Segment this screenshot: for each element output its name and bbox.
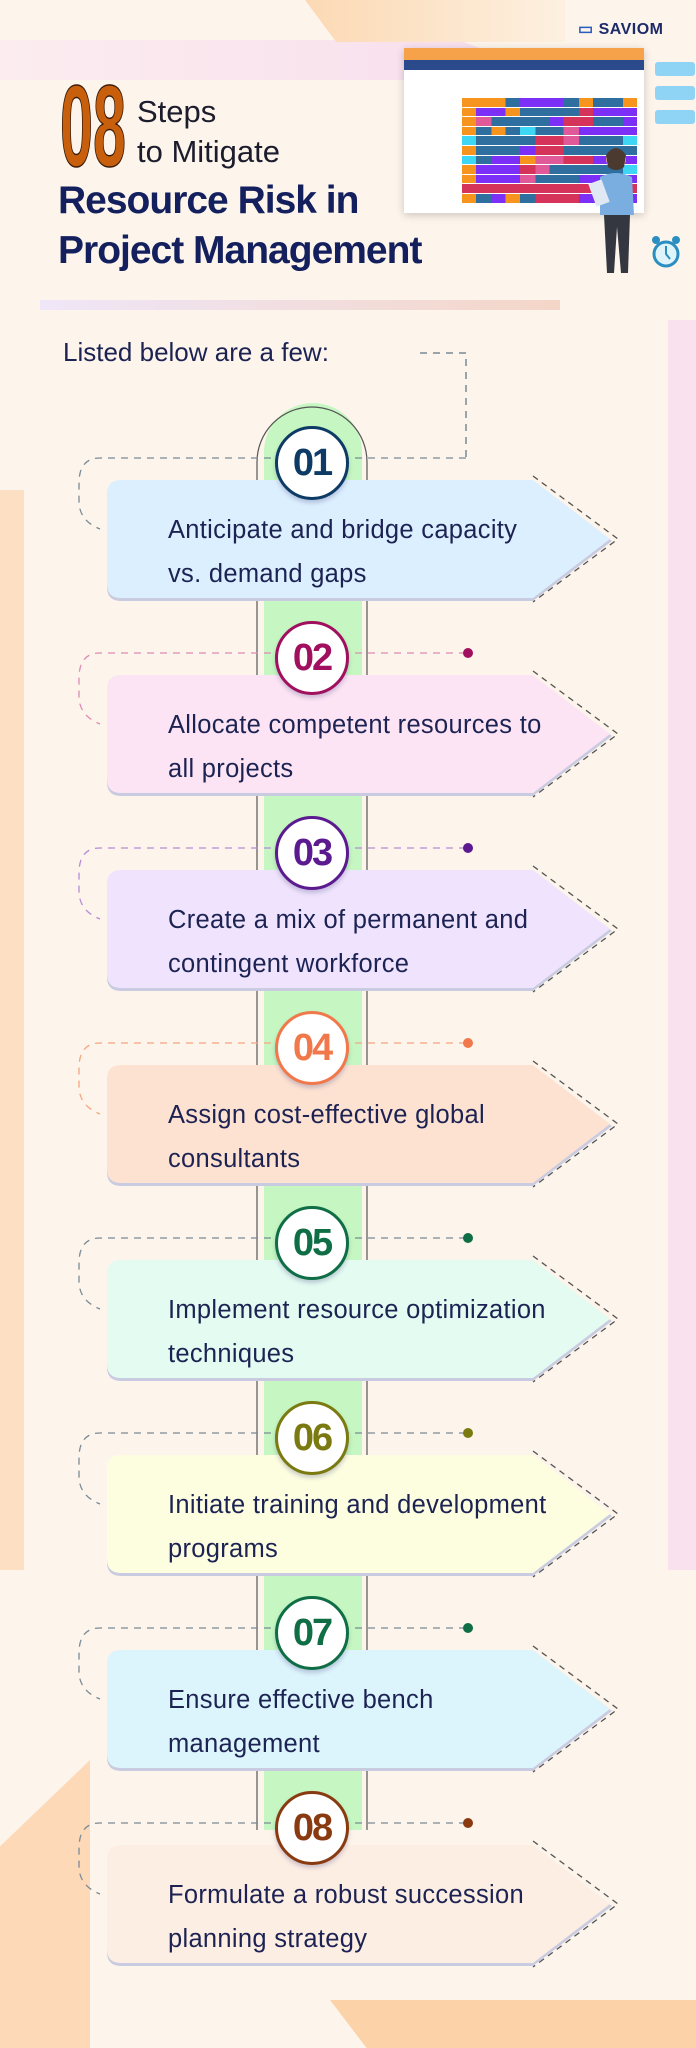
number 05: 05 <box>293 1222 331 1264</box>
number 06 <box>275 1401 349 1475</box>
step 5: Implement resource optimization <box>168 1296 546 1324</box>
step 1: vs. demand gaps <box>168 560 367 588</box>
illustration: man with clipboard <box>588 148 634 273</box>
step 8: planning strategy <box>168 1925 367 1953</box>
title: Steps <box>137 94 216 129</box>
number 04 <box>275 1011 349 1085</box>
number 03: 03 <box>293 832 331 874</box>
intro text: Listed below are a few: <box>63 337 329 367</box>
number 04: 04 <box>293 1027 331 1069</box>
step 3 <box>78 816 618 992</box>
number 08: 08 <box>293 1807 331 1849</box>
title: Resource Risk in <box>58 179 358 222</box>
icon: chat bubbles <box>655 62 695 124</box>
title: to Mitigate <box>137 134 280 169</box>
step 1: Anticipate and bridge capacity <box>168 516 517 544</box>
step 2 <box>78 621 618 798</box>
step 8: Formulate a robust succession <box>168 1881 524 1909</box>
number 06: 06 <box>293 1417 331 1459</box>
step 5: techniques <box>168 1340 294 1368</box>
number 07: 07 <box>293 1612 331 1654</box>
number 02 <box>275 621 349 695</box>
title <box>58 80 422 272</box>
step 7: management <box>168 1730 320 1758</box>
step 2: all projects <box>168 755 293 783</box>
number 08 <box>275 1791 349 1865</box>
number 05 <box>275 1206 349 1280</box>
step 6: Initiate training and development <box>168 1491 546 1519</box>
step 3: Create a mix of permanent and <box>168 906 528 934</box>
icon: alarm clock <box>652 236 680 268</box>
step 4: consultants <box>168 1145 300 1173</box>
number 03 <box>275 816 349 890</box>
step 1 <box>78 426 618 602</box>
number 02: 02 <box>293 637 331 679</box>
step 7 <box>78 1596 618 1772</box>
title: Project Management <box>58 229 421 272</box>
logo: Saviom: ▭ SAVIOM <box>578 21 664 38</box>
step 3: contingent workforce <box>168 950 409 978</box>
step 6: programs <box>168 1535 278 1563</box>
number 01: 01 <box>293 442 331 484</box>
step 5 <box>78 1206 618 1382</box>
number 07 <box>275 1596 349 1670</box>
step 4 <box>78 1011 618 1188</box>
step 8 <box>78 1791 618 1968</box>
step 7: Ensure effective bench <box>168 1686 434 1714</box>
step 6 <box>78 1401 618 1578</box>
step 2: Allocate competent resources to <box>168 711 542 739</box>
header illustration: dashboard screenshot <box>404 48 644 213</box>
number 01 <box>275 426 349 500</box>
step 4: Assign cost-effective global <box>168 1101 485 1129</box>
